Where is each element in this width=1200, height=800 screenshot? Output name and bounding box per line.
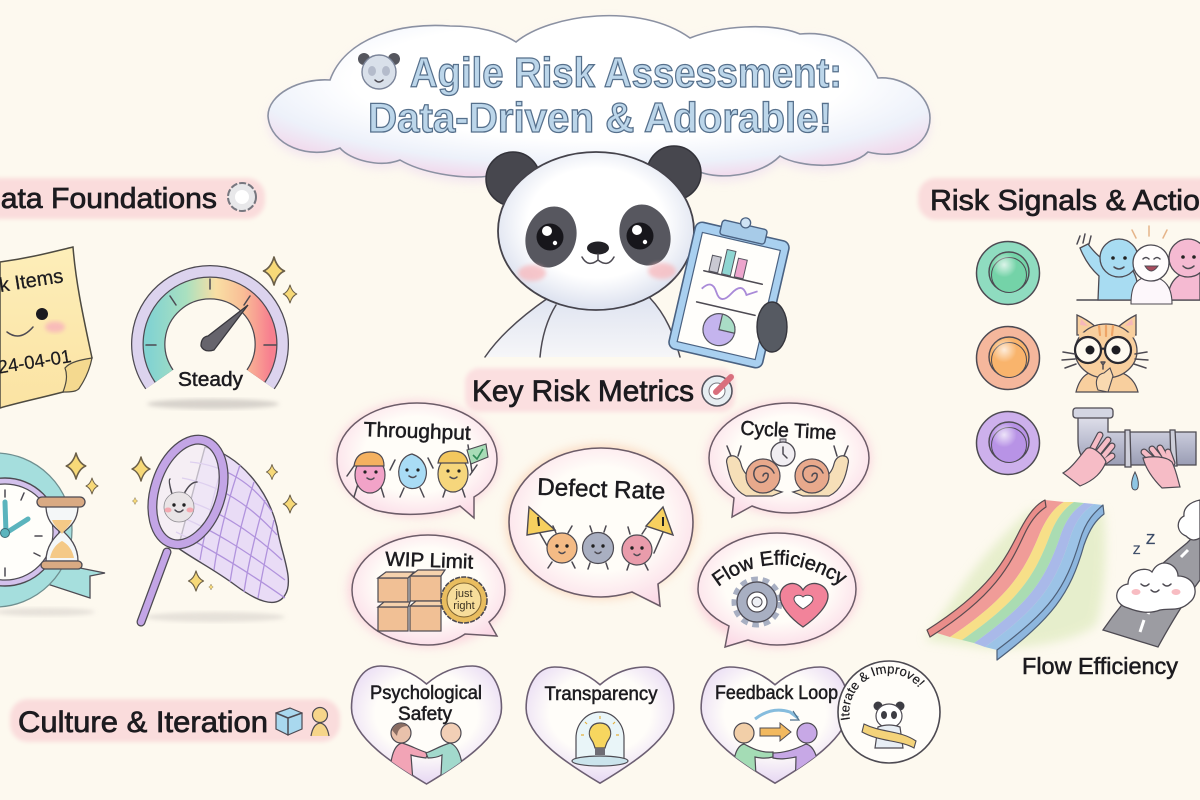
bubble: flow efficiency <box>692 527 862 651</box>
heart: transparency <box>526 667 674 783</box>
people shaking hands <box>390 722 462 776</box>
workers with flag <box>347 444 488 497</box>
icon: speedometer gauge <box>138 257 297 409</box>
panda mascot <box>485 146 794 369</box>
icon: mini panda <box>358 53 400 89</box>
bubble: defect rate: Defect Rate <box>537 474 666 505</box>
heading: data foundations <box>0 178 265 219</box>
heart: psychological safety <box>352 666 502 795</box>
warning bugs <box>527 507 673 570</box>
badge: just right: right <box>453 600 475 612</box>
bubble: throughput <box>335 401 499 518</box>
heart: transparency: Transparency <box>544 684 658 705</box>
heart: psychological safety: Safety <box>398 704 452 725</box>
section: risk signals and actions <box>918 178 1200 679</box>
icon: second cloud <box>1178 500 1200 540</box>
title text <box>368 49 842 141</box>
panda ears <box>486 146 701 206</box>
icon: road <box>1103 530 1200 647</box>
stacked boxes <box>378 570 445 631</box>
heart: psychological safety: Psychological <box>370 683 482 704</box>
icon: clock and hourglass <box>0 453 105 616</box>
slide and road scene <box>925 500 1200 679</box>
badge: iterate and improve <box>837 660 941 764</box>
bubble: defect rate <box>506 445 696 606</box>
heart: feedback loop <box>701 667 849 795</box>
snails <box>727 446 848 496</box>
bubble: wip limit: WIP Limit <box>385 548 474 574</box>
heading: culture and iteration: Culture & Iteration <box>18 706 268 739</box>
heading: key risk metrics: Key Risk Metrics <box>472 375 694 408</box>
bubble: cycle time: Cycle Time <box>740 418 837 445</box>
icon: rainbow slide <box>927 500 1104 660</box>
icon: sleeping cloud: Z <box>1133 543 1140 557</box>
signal button: orange <box>976 326 1040 390</box>
heading: culture and iteration <box>10 699 340 742</box>
section: data foundations <box>0 178 297 622</box>
two people exchanging feedback <box>733 708 818 772</box>
section: culture and iteration <box>9 660 941 785</box>
stopwatch <box>771 439 795 466</box>
heart <box>780 583 828 627</box>
heading: key risk metrics <box>465 368 735 412</box>
bubble: cycle time <box>707 401 871 517</box>
icon: cat with glasses <box>1062 315 1148 392</box>
icon: bug catching net <box>132 430 297 622</box>
signal button: green <box>976 242 1040 304</box>
panda body <box>485 298 680 357</box>
caption: flow efficiency: Flow Efficiency <box>1022 653 1178 679</box>
clipboard with charts <box>668 207 794 369</box>
icon: grass hill <box>925 510 1105 648</box>
icon: leaking pipe with hands <box>1063 408 1196 490</box>
hourglass <box>37 497 85 569</box>
bubble: throughput: Throughput <box>363 418 471 445</box>
badge: just right: just <box>454 588 473 600</box>
icon: sleeping cloud <box>1117 531 1195 612</box>
badge: just right <box>441 577 487 623</box>
title cloud <box>268 16 930 182</box>
caught bug <box>164 479 197 522</box>
badge: iterate and improve: Iterate & Improve! <box>840 666 925 720</box>
glass dome with light bulb <box>572 712 628 766</box>
section: key risk metrics <box>332 367 874 651</box>
title text: Data-Driven & Adorable! <box>368 94 832 141</box>
mini panda with ribbon <box>862 702 916 748</box>
icon: sticky note <box>0 247 92 408</box>
bubble: flow efficiency: Flow Efficiency <box>711 550 848 586</box>
icon: speedometer gauge: Steady <box>178 369 243 391</box>
signal button: purple <box>976 412 1040 474</box>
bubble: wip limit <box>348 533 508 647</box>
panda head <box>498 152 694 310</box>
panda face <box>518 198 678 281</box>
gear <box>736 581 778 623</box>
right hand <box>1143 448 1180 488</box>
heart: feedback loop: Feedback Loop <box>715 683 838 704</box>
title text: Agile Risk Assessment: <box>410 49 842 96</box>
icon: sleeping cloud: Z <box>1146 531 1155 548</box>
icon: cheering team <box>1077 226 1200 304</box>
left hand <box>1063 435 1112 486</box>
